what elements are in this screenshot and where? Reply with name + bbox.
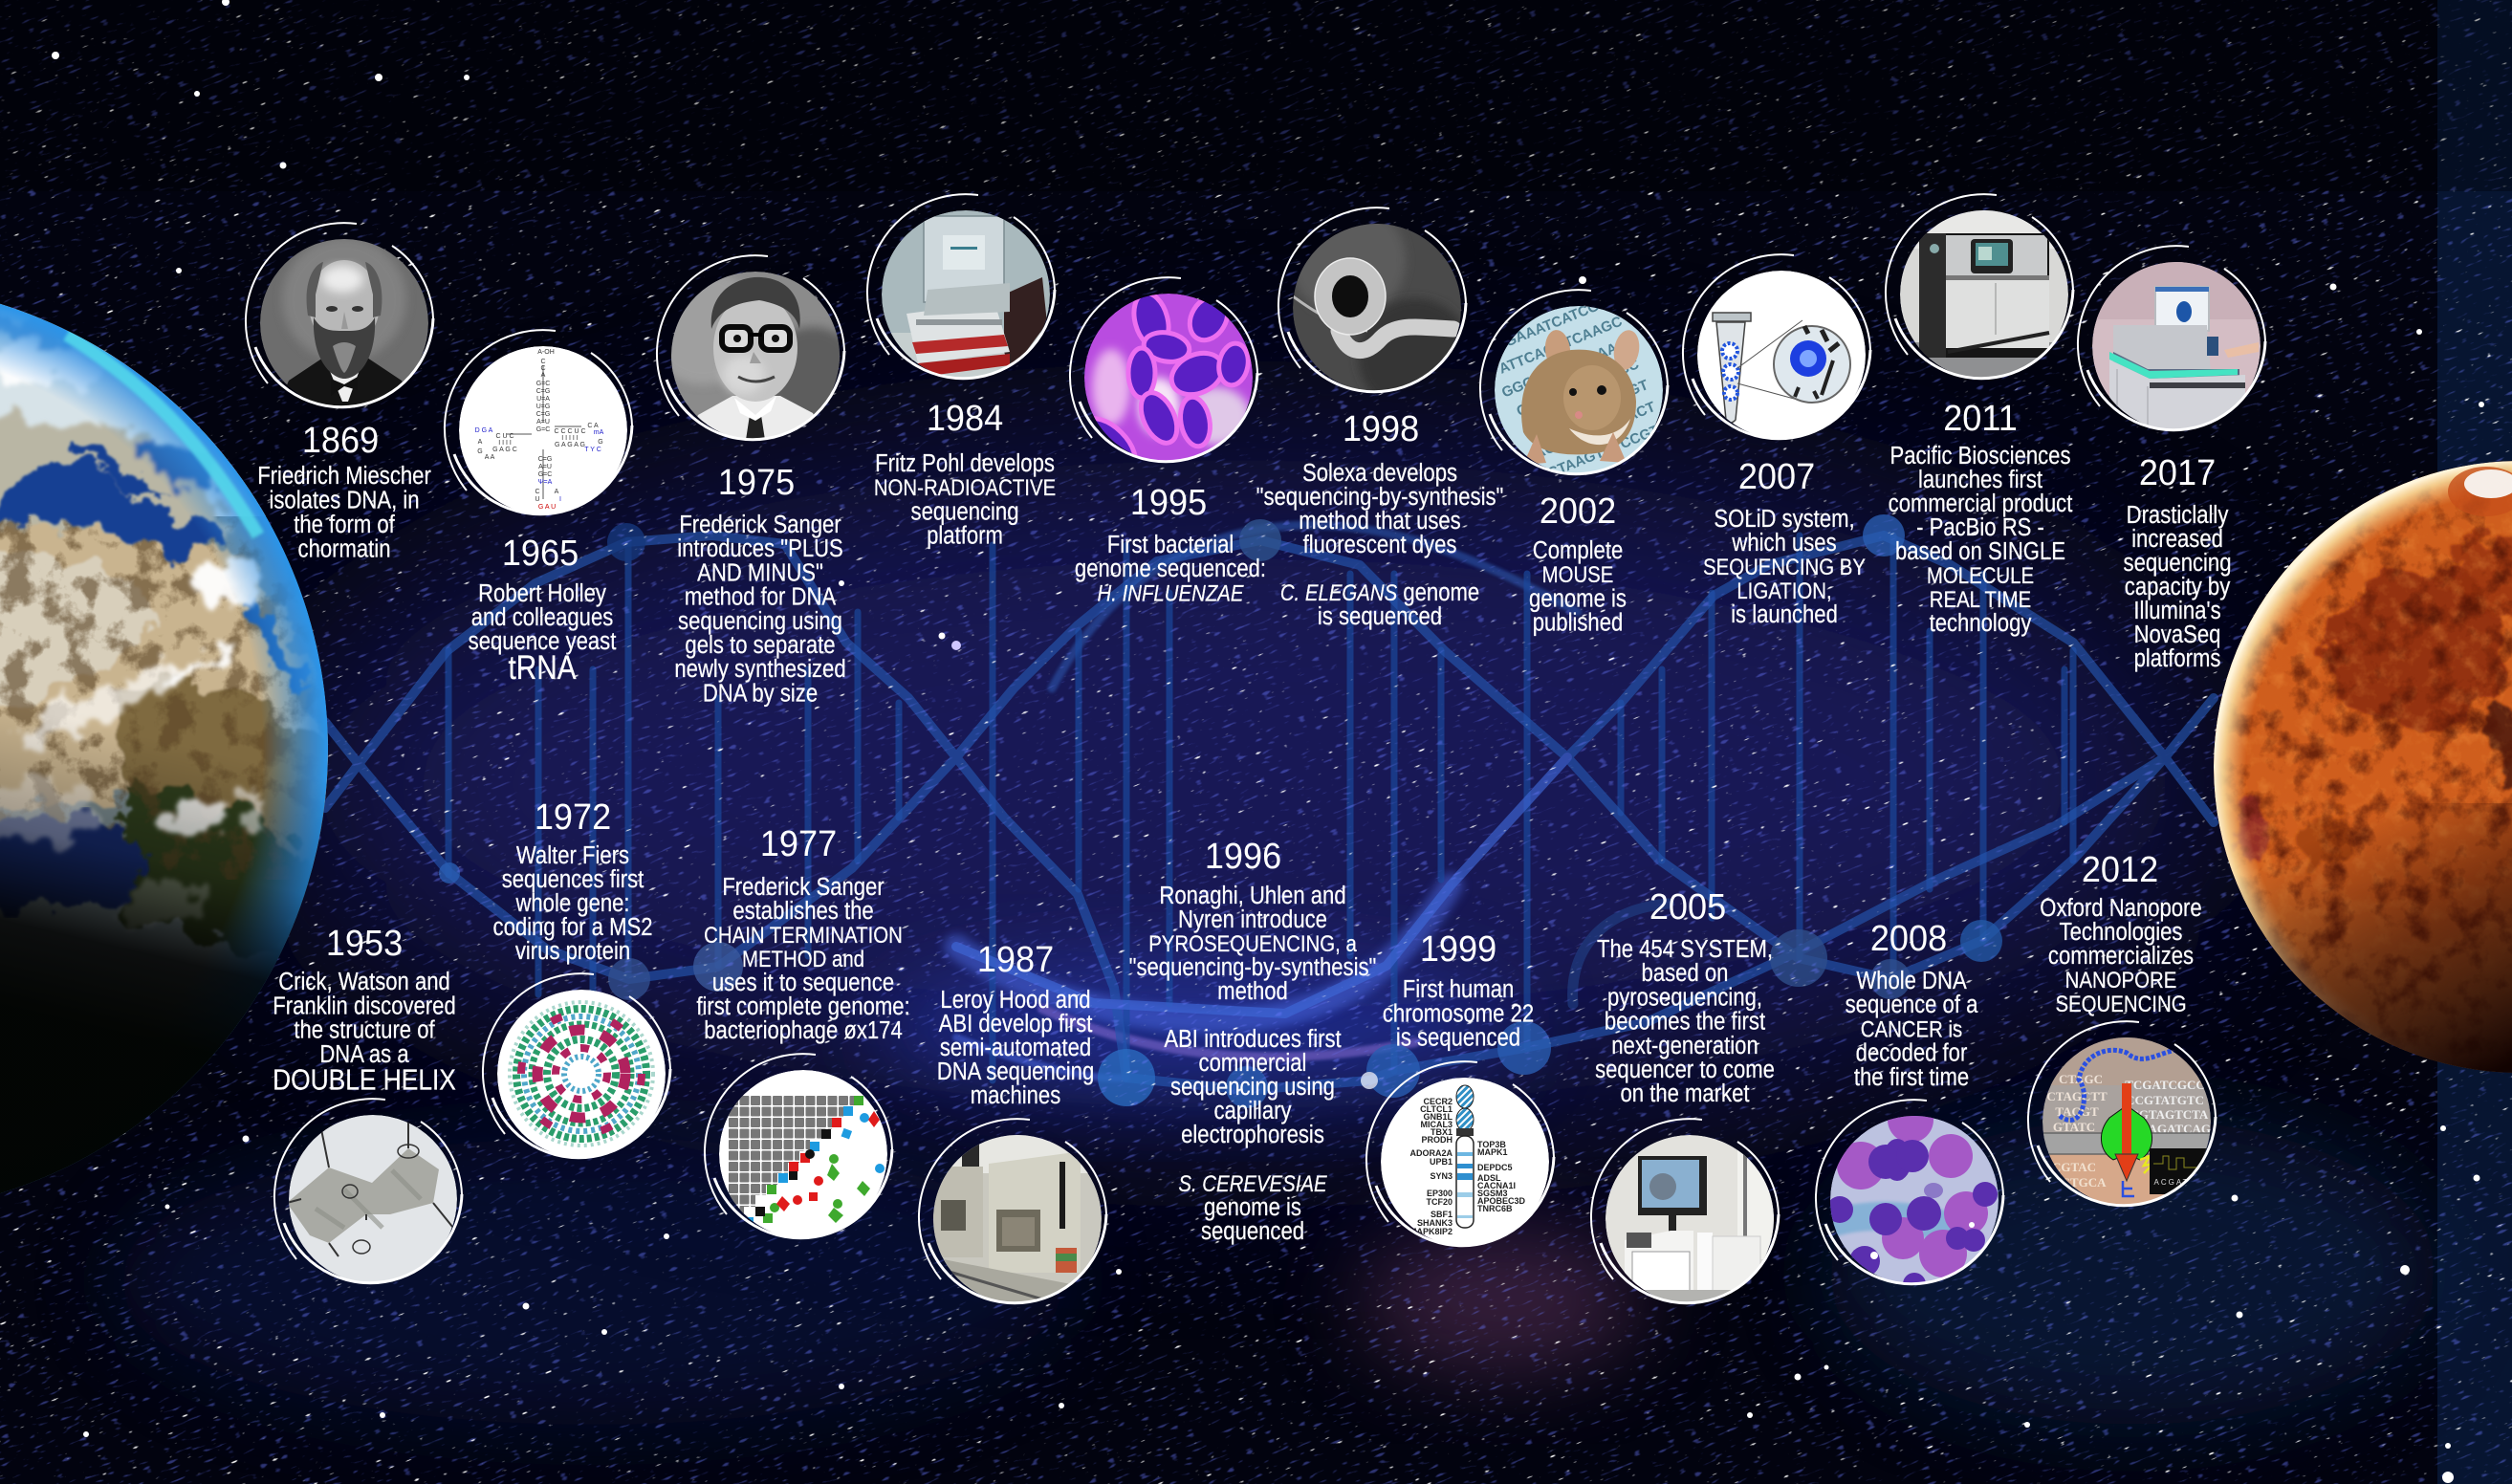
diagram: tRNA cloverleaf: C — [540, 365, 546, 372]
description: DOUBLE HELIX — [273, 1063, 456, 1097]
description: C. ELEGANS genome — [1280, 578, 1479, 606]
diagram: tRNA cloverleaf: Ψ=A — [538, 479, 553, 486]
description: First human — [1403, 975, 1514, 1003]
diagram: chromosome 22 gene map: GNB1L — [1423, 1112, 1453, 1122]
year: 1869 — [302, 419, 379, 460]
diagram: tRNA cloverleaf: A — [478, 439, 483, 446]
diagram: chromosome 22 gene map: MICAL3 — [1421, 1120, 1453, 1129]
diagram: chromosome 22 gene map — [1366, 1061, 1554, 1246]
year: 2005 — [1649, 885, 1726, 927]
photo: mouse on DNA letters — [1480, 290, 1673, 487]
diagram: chromosome 22 gene map: ADSL — [1477, 1173, 1501, 1183]
diagram: chromosome 22 gene map: CACNA1I — [1477, 1181, 1516, 1190]
diagram: chromosome 22 gene map: TOP3B — [1477, 1140, 1506, 1149]
description: ABI develop first — [939, 1010, 1093, 1037]
diagram: nanopore sequencing: CCGTATGTC — [2126, 1093, 2204, 1107]
description: becomes the first — [1605, 1008, 1765, 1036]
diagram: MS2 virus capsid — [483, 973, 670, 1158]
diagram: tRNA cloverleaf: C=G — [538, 456, 552, 463]
diagram: tRNA cloverleaf: U=G — [536, 404, 550, 410]
Sahara and Africa land — [0, 526, 330, 956]
diagram: nanopore sequencing: CGTAC — [2052, 1160, 2096, 1174]
diagram: tRNA cloverleaf: C A — [587, 423, 599, 429]
photo: ABI sequencing machines — [919, 1119, 1106, 1305]
strands — [325, 535, 2214, 1090]
description: bacteriophage øx174 — [704, 1016, 903, 1044]
description: establishes the — [732, 897, 874, 925]
description: DNA sequencing — [937, 1058, 1094, 1085]
milestone: 2002 — [1480, 290, 1673, 637]
description: Nyren introduce — [1178, 906, 1327, 933]
diagram: tRNA cloverleaf: A — [541, 372, 546, 379]
diagram: tRNA cloverleaf: A-OH — [537, 349, 555, 356]
photo: mouse on DNA letters: ACTTGGCCTAACT — [1532, 399, 1658, 462]
description: Walter Fiers — [516, 841, 629, 869]
year: 2008 — [1870, 917, 1947, 958]
description: sequencing — [911, 498, 1018, 526]
milestone: 1999 — [1366, 928, 1554, 1246]
diagram: tRNA cloverleaf: A A — [485, 454, 495, 461]
milestone: 1953 — [273, 922, 462, 1283]
description: DNA as a — [319, 1040, 409, 1068]
description: Ronaghi, Uhlen and — [1159, 882, 1346, 909]
description: Illumina's — [2133, 597, 2221, 624]
description: semi-automated — [940, 1034, 1091, 1061]
diagram: chromosome 22 gene map: TBX1 — [1431, 1127, 1453, 1137]
diagram: chain termination sequencing — [705, 1054, 892, 1238]
photo: mouse on DNA letters: GCTAAGCTCAGGT — [1522, 377, 1650, 442]
description: introduces "PLUS — [677, 535, 843, 563]
description: sequencing using — [1170, 1073, 1335, 1101]
photo: metal adenine model — [274, 1099, 462, 1283]
milestone: 1984 — [867, 194, 1056, 550]
milestone: 2005 — [1591, 885, 1779, 1305]
description: "sequencing-by-synthesis" — [1256, 483, 1503, 511]
diagram: nanopore sequencing: TCGATCGCC — [2125, 1078, 2205, 1092]
photo: mouse on DNA letters: CAAGTTCATCCGC — [1515, 356, 1642, 420]
Mediterranean sea and Red Sea — [0, 442, 308, 698]
description: H. INFLUENZAE — [1098, 580, 1245, 606]
year: 1984 — [927, 397, 1003, 438]
description: increased — [2131, 525, 2223, 553]
description: based on SINGLE — [1895, 537, 2065, 565]
description: the first time — [1854, 1063, 1969, 1091]
description: genome is — [1529, 585, 1627, 613]
diagram: chromosome 22 gene map: SBF1 — [1431, 1210, 1453, 1219]
diagram: tRNA cloverleaf: G A G A G — [555, 442, 585, 448]
description: platform — [927, 522, 1003, 550]
diagram: chromosome 22 gene map: CECR2 — [1423, 1097, 1453, 1106]
description: Robert Holley — [478, 579, 606, 607]
year: 2002 — [1540, 490, 1616, 531]
description: whole gene: — [515, 889, 630, 917]
description: tRNA — [508, 649, 577, 687]
description: sequenced — [1201, 1217, 1304, 1245]
description: MOUSE — [1542, 562, 1613, 588]
milestone: 2017 — [2078, 246, 2265, 672]
milestone: 2011 — [1886, 194, 2073, 637]
DNA double helix — [325, 514, 2214, 1108]
diagram: tRNA cloverleaf: U=A — [536, 396, 550, 403]
diagram: nanopore sequencing: TCGTAGTCTA — [2122, 1107, 2209, 1122]
year: 1996 — [1205, 835, 1281, 876]
diagram: tRNA cloverleaf: D G A — [475, 427, 493, 434]
description: method — [1217, 977, 1288, 1005]
diagram: tRNA cloverleaf: U — [535, 496, 540, 503]
planet: Mars — [2209, 459, 2512, 1080]
description: which uses — [1731, 529, 1837, 556]
diagram: tRNA cloverleaf: I I I I I — [561, 435, 579, 442]
description: decoded for — [1856, 1039, 1967, 1067]
diagram: tRNA cloverleaf: C — [535, 489, 540, 495]
year: 1999 — [1420, 928, 1496, 969]
photo: Illumina NovaSeq — [2078, 246, 2265, 432]
description: Frederick Sanger — [722, 873, 885, 901]
description: sequencing using — [678, 607, 842, 635]
northern clouds and Europe — [0, 304, 266, 516]
description: and colleagues — [471, 603, 613, 631]
description: REAL TIME — [1930, 586, 2031, 612]
description: METHOD and — [742, 946, 864, 971]
description: Whole DNA — [1856, 967, 1968, 994]
milestone: 2007 — [1683, 254, 1870, 628]
description: NANOPORE — [2065, 967, 2176, 993]
description: pyrosequencing, — [1607, 984, 1762, 1012]
diagram: tRNA cloverleaf: C=G — [536, 388, 550, 395]
diagram: tRNA cloverleaf: A=U — [536, 419, 550, 426]
diagram: tRNA cloverleaf: G=C — [536, 426, 550, 433]
description: Friedrich Miescher — [257, 462, 431, 490]
diagram: chromosome 22 gene map: DEPDC5 — [1477, 1163, 1513, 1172]
diagram: tRNA cloverleaf: G A U — [538, 504, 556, 511]
planet: Earth — [0, 283, 344, 1214]
description: LIGATION, — [1737, 578, 1832, 603]
year: 1977 — [760, 822, 837, 863]
diagram: nanopore sequencing: TACGT — [2055, 1104, 2099, 1119]
description: technology — [1930, 609, 2031, 637]
description: CHAIN TERMINATION — [704, 922, 903, 948]
milestone: 1995 — [1070, 277, 1266, 606]
milestone: 1965 — [445, 330, 632, 687]
year: 1975 — [718, 461, 795, 502]
diagram: nanopore sequencing: CTAGCTT — [2046, 1089, 2108, 1103]
diagram: SOLiD tube and bead — [1683, 254, 1870, 439]
description: capillary — [1213, 1097, 1292, 1124]
description: capacity by — [2125, 573, 2230, 600]
photo: H. influenzae bacteria — [1070, 277, 1257, 480]
description: next-generation — [1611, 1032, 1758, 1059]
Indian ocean side — [0, 817, 141, 908]
description: NovaSeq — [2134, 621, 2220, 648]
description: commercial product — [1889, 490, 2073, 517]
description: launches first — [1918, 466, 2042, 493]
year: 1965 — [502, 532, 579, 573]
diagram: chromosome 22 gene map: SHANK3 — [1417, 1218, 1453, 1228]
milestone: 1977 — [696, 822, 910, 1238]
diagram: nanopore sequencing: TGTAGATCAG — [2123, 1122, 2211, 1136]
milestone: 1869 — [246, 223, 433, 563]
diagram: chromosome 22 gene map: SYN3 — [1430, 1171, 1453, 1181]
photo: mouse on DNA letters: ATTCAGGTCAAGC — [1496, 314, 1625, 378]
diagram: tRNA cloverleaf: C C C U C — [554, 428, 586, 435]
description: DNA by size — [703, 680, 818, 708]
description: sequence of a — [1846, 992, 1978, 1019]
diagram: tRNA cloverleaf: G=C — [538, 471, 552, 478]
diagram: chromosome 22 gene map: MAPK8IP2 — [1409, 1227, 1453, 1236]
diagram: chromosome 22 gene map: TNRC6B — [1477, 1204, 1513, 1213]
description: AND MINUS" — [697, 559, 823, 587]
milestone: 1987 — [919, 938, 1106, 1305]
diagram: tRNA cloverleaf: G — [598, 439, 603, 446]
description: Oxford Nanopore — [2040, 894, 2202, 922]
description: "sequencing-by-synthesis" — [1129, 953, 1376, 981]
diagram: nanopore sequencing: ACGATCG — [2154, 1178, 2204, 1187]
diagram: chromosome 22 gene map: EP300 — [1427, 1189, 1453, 1198]
description: NON-RADIOACTIVE — [874, 475, 1056, 501]
diagram: tRNA cloverleaf: C=G — [536, 411, 550, 418]
description: Fritz Pohl develops — [875, 449, 1055, 477]
diagram: tRNA cloverleaf — [445, 330, 632, 514]
year: 1972 — [535, 796, 611, 837]
description: virus protein — [515, 937, 630, 965]
diagram: tRNA cloverleaf: I I I I — [498, 440, 512, 447]
diagram: chromosome 22 gene map: PRODH — [1421, 1135, 1453, 1145]
description: sequence yeast — [469, 627, 617, 655]
description: Crick, Watson and — [278, 968, 450, 995]
description: is sequenced — [1318, 602, 1442, 630]
year: 2017 — [2139, 451, 2216, 492]
glowing arcs behind helix — [956, 525, 1669, 1079]
diagram: nanopore sequencing: CTAGC — [2059, 1072, 2103, 1086]
description: Frederick Sanger — [679, 511, 841, 538]
milestone: 2012 — [2028, 848, 2216, 1210]
description: genome sequenced: — [1075, 556, 1266, 583]
clouds — [0, 560, 270, 928]
milestone: 1998 — [1256, 203, 1503, 630]
diagram: tRNA cloverleaf: C U C — [495, 433, 514, 440]
diagram: tRNA cloverleaf: T Y C — [584, 447, 601, 453]
diagram: chromosome 22 gene map: TCF20 — [1426, 1197, 1453, 1207]
diagram: tRNA cloverleaf: A=U — [538, 464, 552, 470]
description: electrophoresis — [1181, 1121, 1324, 1148]
description: PYROSEQUENCING, a — [1148, 930, 1357, 956]
description: chromosome 22 — [1383, 1000, 1534, 1028]
description: genome is — [1204, 1193, 1301, 1221]
description: ABI introduces first — [1164, 1025, 1342, 1053]
description: fluorescent dyes — [1303, 531, 1456, 558]
description: is launched — [1731, 600, 1838, 628]
description: coding for a MS2 — [493, 913, 652, 941]
description: First bacterial — [1107, 531, 1234, 558]
diagram: chromosome 22 gene map: CLTCL1 — [1420, 1104, 1453, 1114]
description: Technologies — [2060, 918, 2182, 946]
year: 2007 — [1738, 455, 1815, 496]
description: Complete — [1533, 536, 1623, 564]
description: isolates DNA, in — [269, 487, 420, 514]
year: 1987 — [977, 938, 1054, 979]
description: CANCER is — [1861, 1016, 1962, 1042]
description: - PacBio RS - — [1916, 513, 2044, 541]
diagram: tRNA cloverleaf: C — [540, 359, 546, 365]
diagram: chromosome 22 gene map: ADORA2A — [1409, 1148, 1453, 1158]
year: 1953 — [326, 922, 403, 963]
description: platforms — [2134, 644, 2220, 672]
diagram: chromosome 22 gene map: MAPK1 — [1477, 1147, 1508, 1157]
photo: 454 system — [1591, 1119, 1779, 1305]
milestone: 2008 — [1816, 917, 2003, 1296]
description: Drasticlally — [2127, 501, 2228, 529]
year: 2011 — [1943, 397, 2018, 438]
diagram: tRNA cloverleaf: G — [477, 448, 483, 455]
description: based on — [1642, 960, 1728, 988]
photo: non-radioactive gel platform — [867, 194, 1055, 381]
photo: mouse on DNA letters: AGAAATCATCGC — [1493, 294, 1611, 354]
diagram: tRNA cloverleaf: mA — [594, 429, 604, 436]
description: the structure of — [294, 1016, 435, 1044]
description: Solexa develops — [1302, 459, 1457, 487]
diagram: tRNA cloverleaf: G=C — [536, 381, 550, 387]
year: 1998 — [1343, 407, 1419, 448]
diagram: nanopore sequencing: CTGCA — [2062, 1175, 2107, 1189]
diagram: nanopore sequencing — [2028, 1021, 2216, 1210]
nodes — [439, 514, 2002, 1108]
description: sequences first — [502, 865, 644, 893]
description: uses it to sequence — [712, 969, 894, 996]
diagram: tRNA cloverleaf: A — [555, 489, 559, 495]
description: SEQUENCING BY — [1703, 554, 1866, 579]
photo: cancer cells — [1816, 1097, 2003, 1296]
dark maroon regions — [2226, 531, 2512, 876]
description: Leroy Hood and — [940, 986, 1091, 1014]
photo: PacBio RS instrument — [1886, 194, 2073, 381]
description: method for DNA — [685, 583, 837, 611]
photo: mouse on DNA letters: CTAAGTCTCCGT — [1545, 422, 1662, 482]
diagram: nanopore sequencing: GTATC — [2053, 1120, 2095, 1134]
description: method that uses — [1299, 507, 1461, 535]
description: MOLECULE — [1927, 562, 2034, 588]
description: newly synthesized — [674, 656, 846, 684]
description: the form of — [294, 511, 395, 538]
description: published — [1533, 609, 1623, 637]
description: Pacific Biosciences — [1889, 442, 2071, 469]
milestone: 1972 — [483, 796, 670, 1158]
description: gels to separate — [685, 631, 836, 659]
diagram: chromosome 22 gene map: SGSM3 — [1477, 1189, 1508, 1198]
description: chormatin — [298, 535, 390, 563]
photo: Friedrich Miescher — [246, 223, 433, 407]
diagram: chromosome 22 gene map: UPB1 — [1430, 1157, 1453, 1167]
description: machines — [971, 1081, 1060, 1109]
description: S. CEREVESIAE — [1178, 1170, 1328, 1196]
year: 1995 — [1130, 481, 1207, 522]
description: SEQUENCING — [2055, 991, 2187, 1016]
photo: mouse on DNA letters: GGGATTCCGCAAAA — [1499, 332, 1639, 402]
description: commercializes — [2048, 942, 2194, 970]
description: sequencing — [2124, 549, 2231, 577]
description: is sequenced — [1396, 1024, 1520, 1052]
diagram: chromosome 22 gene map: APOBEC3D — [1477, 1196, 1526, 1206]
milestone: 1996 — [1129, 835, 1376, 1245]
photo: C. elegans worm — [1278, 203, 1473, 413]
photo: Frederick Sanger — [645, 255, 861, 440]
diagram: tRNA cloverleaf: I — [559, 496, 561, 503]
description: Franklin discovered — [273, 993, 456, 1020]
rungs — [448, 535, 2073, 1080]
description: sequencer to come — [1595, 1056, 1775, 1083]
description: SOLiD system, — [1714, 505, 1855, 533]
milestone: 1975 — [645, 255, 861, 708]
description: The 454 SYSTEM, — [1597, 935, 1773, 963]
year: 2012 — [2082, 848, 2158, 889]
description: on the market — [1620, 1080, 1750, 1108]
description: commercial — [1199, 1049, 1306, 1077]
description: first complete genome: — [696, 993, 910, 1020]
diagram: tRNA cloverleaf: G A G C — [492, 447, 517, 453]
